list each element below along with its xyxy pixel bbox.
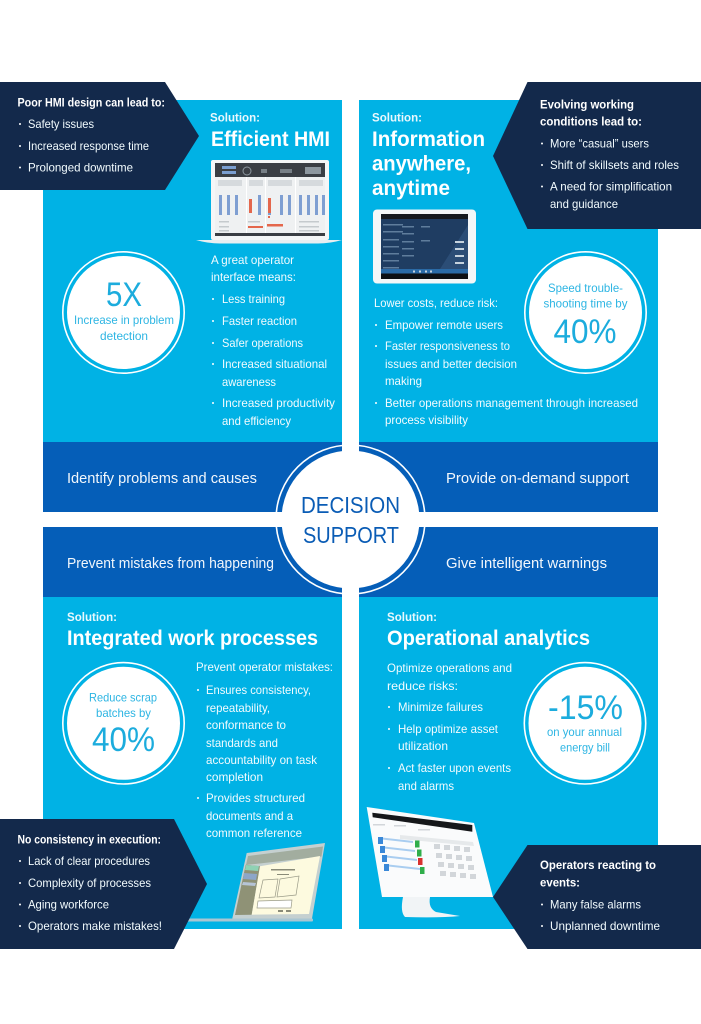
text: optimize operations list: Optimize operations and [387,661,512,675]
text: prevent operator mistakes list: Ensures consistency, [206,683,311,697]
heading: operational analytics: Operational analytics [387,627,590,650]
text: prevent operator mistakes list: standards and [206,736,278,750]
heading: integrated work processes [67,610,318,650]
heading: information anywhere [372,110,485,200]
banner: operators reacting to events [493,845,701,949]
text: optimize operations list [387,661,512,793]
callout circle: 40% troubleshooting: Speed trouble- [548,281,623,295]
text: great operator interface list: Safer operations [222,336,303,350]
banner: operators reacting to events: Unplanned downtime [550,919,660,933]
text: great operator interface list: Faster reaction [222,314,297,328]
banner: no consistency in execution: No consistency in execution: [18,832,161,846]
banner: poor HMI design: Prolonged downtime [28,160,133,174]
text: great operator interface list: Less training [222,292,285,306]
icon: laptop with work document [183,843,325,922]
band: intelligent warnings: Give intelligent warnings [446,555,607,572]
text: great operator interface list: Increased productivity [222,396,335,410]
icon: desktop monitor with analytics [367,807,493,917]
text: lower costs list: making [385,374,422,388]
center badge: decision support: SUPPORT [303,522,399,548]
callout circle: 5X: 5X [106,276,142,314]
banner: operators reacting to events: Operators reacting to [540,858,656,872]
panel: operational analytics [359,527,658,929]
heading: information anywhere: Solution: [372,110,422,124]
banner: evolving working conditions: and guidance [550,197,618,211]
text: lower costs list: Empower remote users [385,318,503,332]
text: prevent operator mistakes list: Provides structured [206,791,305,805]
text: prevent operator mistakes list: Prevent operator mistakes: [196,660,333,674]
callout circle: 40% troubleshooting: shooting time by [544,296,628,310]
callout circle: 5X: detection [100,329,148,343]
icon: tablet [373,210,476,284]
banner: poor HMI design: Poor HMI design can lead to: [18,96,165,110]
text: optimize operations list: utilization [398,739,448,753]
text: lower costs list: process visibility [385,413,468,427]
callout circle: 40% troubleshooting [525,252,646,373]
text: prevent operator mistakes list: accountability on task [206,753,318,767]
banner: operators reacting to events: events: [540,876,580,890]
text: lower costs list: Lower costs, reduce risk: [374,296,498,310]
text: lower costs list [374,296,638,427]
text: great operator interface list: interface means: [211,270,296,284]
text: lower costs list: Faster responsiveness to [385,339,510,353]
callout circle: 40% troubleshooting: 40% [554,313,616,351]
band: prevent mistakes: Prevent mistakes from happening [67,555,274,572]
banner: poor HMI design: Safety issues [28,117,94,131]
text: great operator interface list: awareness [222,375,276,389]
heading: integrated work processes: Solution: [67,610,117,624]
heading: information anywhere: anytime [372,177,450,200]
text: optimize operations list: Act faster upon events [398,761,511,775]
text: prevent operator mistakes list [196,660,333,840]
band: on-demand support: Provide on-demand support [446,470,630,487]
banner: no consistency in execution: Aging workforce [28,898,109,912]
text: great operator interface list [211,253,335,428]
center badge: decision support [272,442,429,597]
text: optimize operations list: Minimize failures [398,700,483,714]
banner: evolving working conditions: conditions lead to: [540,114,642,128]
text: prevent operator mistakes list: completion [206,770,263,784]
panel: integrated work processes [43,527,342,929]
heading: efficient HMI: Efficient HMI [211,128,330,151]
text: prevent operator mistakes list: common reference [206,826,302,840]
text: optimize operations list: Help optimize asset [398,722,499,736]
heading: efficient HMI: Solution: [210,110,260,124]
callout circle: 5X: Increase in problem [74,313,174,327]
icon: laptop with HMI screen [196,160,342,244]
heading: information anywhere: anywhere, [372,152,471,176]
banner: no consistency in execution [0,819,207,949]
text: optimize operations list: and alarms [398,779,454,793]
text: lower costs list: issues and better decision [385,357,517,371]
banner: poor HMI design: Increased response time [28,139,149,153]
heading: integrated work processes: Integrated work processes [67,627,318,650]
callout circle: 40% scrap: 40% [92,721,155,759]
band: prevent mistakes [43,527,342,597]
text: optimize operations list: reduce risks: [387,679,458,693]
text: lower costs list: Better operations management through increased [385,396,638,410]
banner: no consistency in execution: Lack of clear procedures [28,854,150,868]
heading: efficient HMI [210,110,330,151]
callout circle: 40% scrap [63,663,184,784]
panel: information anywhere [359,100,658,512]
band: on-demand support [359,442,658,512]
banner: evolving working conditions: A need for simplification [550,180,672,194]
banner: evolving working conditions: More “casual” users [550,136,649,150]
callout circle: 5X [63,252,184,373]
callout circle: 40% scrap: Reduce scrap [89,690,157,704]
center badge: decision support: DECISION [301,492,400,518]
panel: efficient HMI [43,100,342,512]
heading: information anywhere: Information [372,128,485,151]
text: great operator interface list: A great operator [211,253,294,267]
callout circle: 40% scrap: batches by [96,706,151,720]
banner: poor HMI design [0,82,199,190]
callout circle: -15% energy bill: -15% [548,689,623,727]
callout circle: -15% energy bill: on your annual [547,725,622,739]
heading: operational analytics [387,610,590,650]
banner: evolving working conditions: Evolving working [540,98,634,112]
band: identify problems [43,442,342,512]
banner: evolving working conditions [493,82,701,229]
callout circle: -15% energy bill [524,663,646,784]
banner: operators reacting to events: Many false alarms [550,898,641,912]
band: identify problems: Identify problems and causes [67,470,257,487]
banner: no consistency in execution: Operators make mistakes! [28,919,162,933]
text: great operator interface list: and efficiency [222,414,291,428]
callout circle: -15% energy bill: energy bill [560,740,610,754]
banner: evolving working conditions: Shift of skillsets and roles [550,158,679,172]
band: intelligent warnings [359,527,658,597]
banner: no consistency in execution: Complexity of processes [28,876,151,890]
text: prevent operator mistakes list: documents and a [206,809,293,823]
text: great operator interface list: Increased situational [222,357,327,371]
text: prevent operator mistakes list: conformance to [206,718,286,732]
text: prevent operator mistakes list: repeatability, [206,701,270,715]
heading: operational analytics: Solution: [387,610,437,624]
